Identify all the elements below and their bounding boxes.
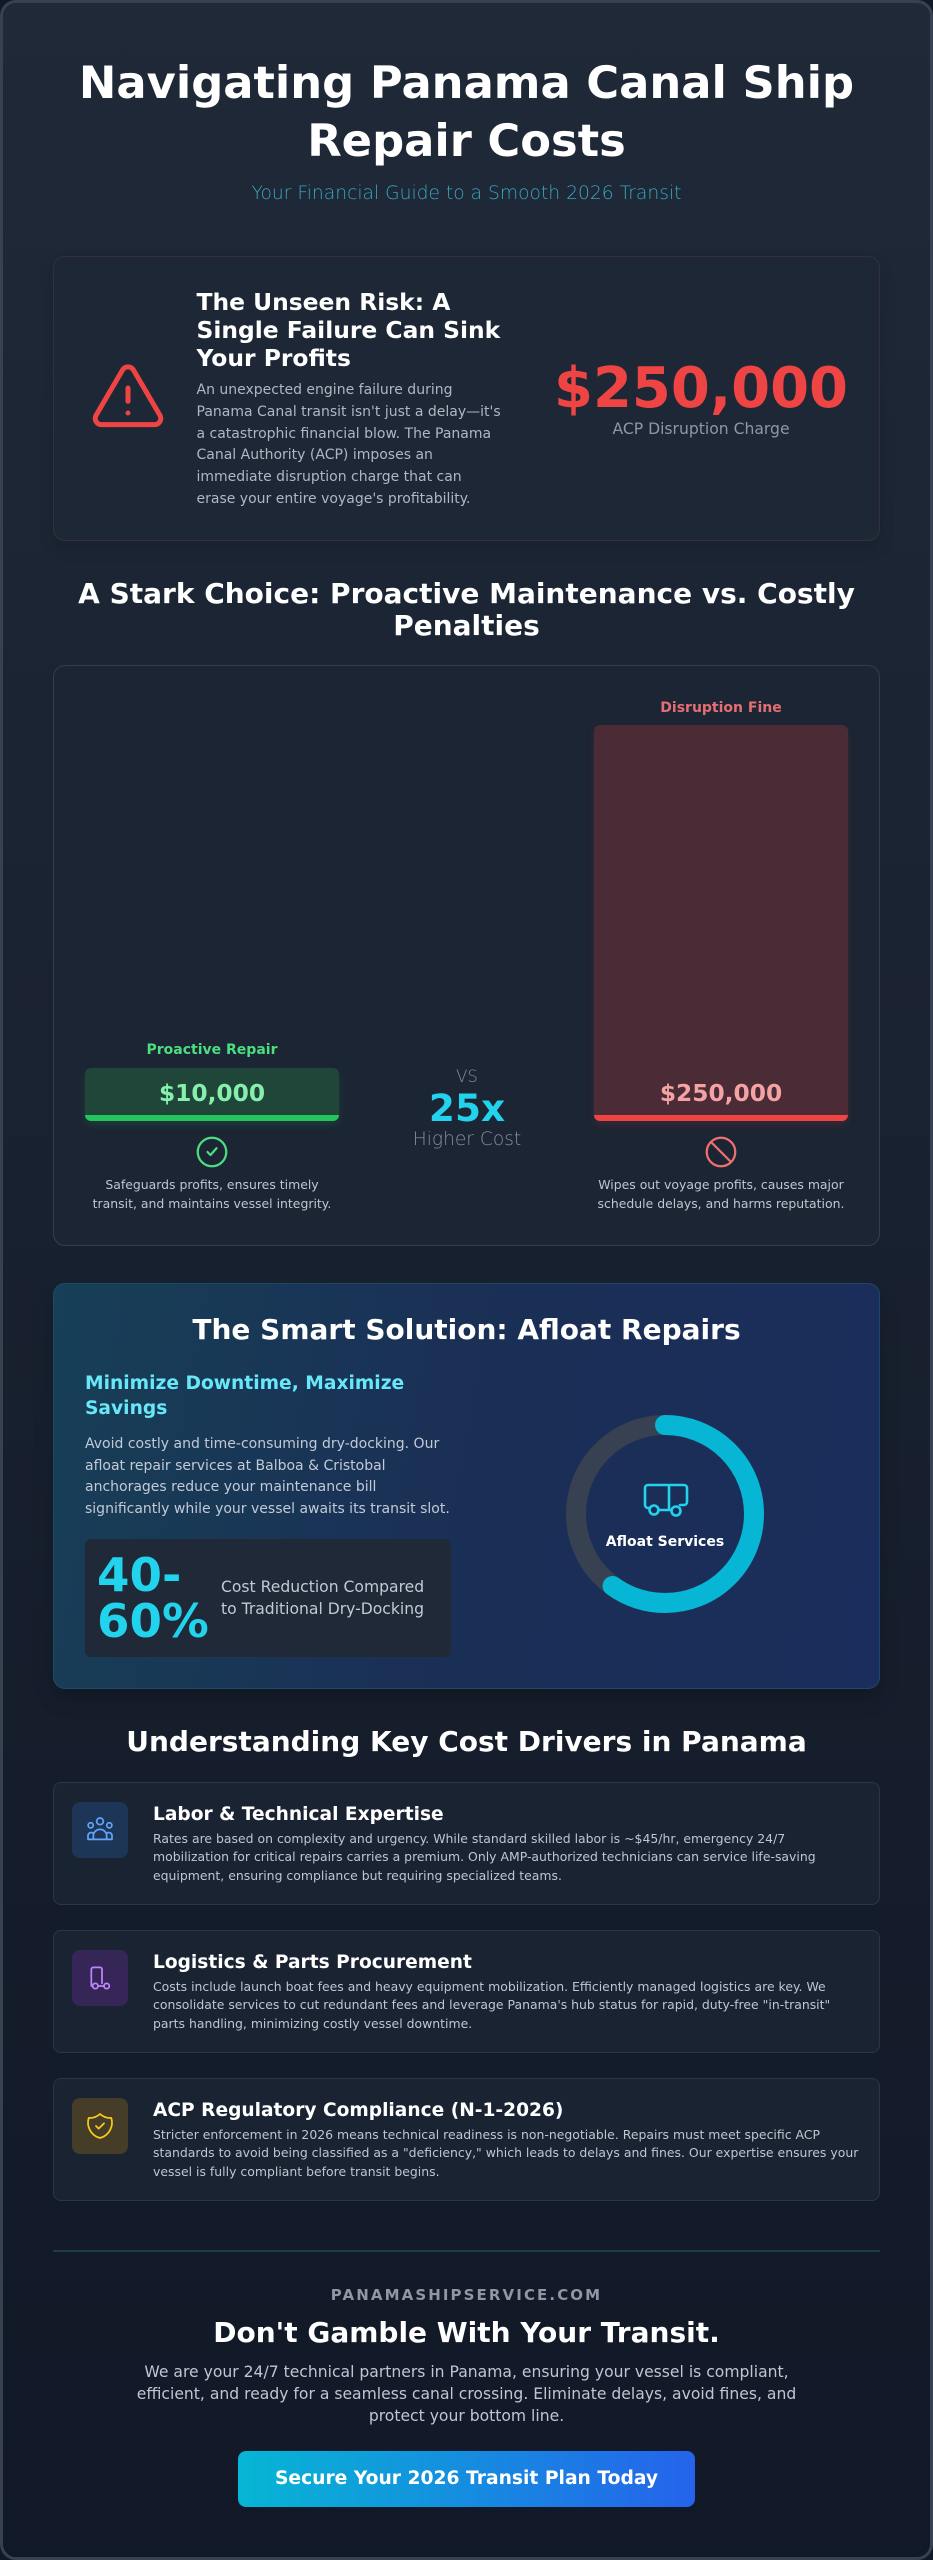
card text: logistics: Costs include launch boat fees and heavy equipment mobilization. Efficiently managed logistics are key. We [153, 1978, 826, 1994]
label: afloat services: Afloat Services [606, 1534, 724, 1550]
heading: stark choice: A Stark Choice: Proactive Maintenance vs. Costly [78, 577, 855, 610]
multiplier: 25x [429, 1086, 505, 1130]
panel: afloat repairs [53, 1283, 880, 1689]
stat box [85, 1539, 451, 1657]
subheading: Minimize Downtime, Maximize [85, 1373, 404, 1394]
card: compliance [53, 2078, 880, 2201]
card title: compliance: ACP Regulatory Compliance (N-1-2026) [153, 2100, 563, 2121]
chart: ring [566, 1415, 764, 1613]
text: disruption impact: Wipes out voyage profits, causes major [598, 1177, 844, 1192]
stat: disruption charge: $250,000 [554, 356, 848, 421]
text: footer: efficient, and ready for a seamless canal crossing. Eliminate delays, avoid fines, and [137, 2385, 796, 2403]
label: disruption: Disruption Fine [660, 700, 782, 716]
stat: cost reduction: 40- [97, 1549, 181, 1603]
card text: compliance: standards to avoid being classified as a "deficiency," which leads to delays and fines. Our expertise ensures your [153, 2145, 858, 2160]
text: unseen risk: erase your entire voyage's profitability. [196, 491, 470, 507]
text: proactive benefits: Safeguards profits, ensures timely [105, 1177, 319, 1192]
text: unseen risk: An unexpected engine failure during [196, 382, 452, 398]
heading: unseen risk: Your Profits [196, 344, 351, 372]
text: disruption impact: schedule delays, and harms reputation. [598, 1196, 844, 1211]
bar: disruption fine [594, 725, 848, 1121]
stat text: Cost Reduction Compared [221, 1578, 424, 1596]
label: proactive: Proactive Repair [147, 1042, 277, 1058]
text: footer [137, 2363, 796, 2425]
stat label: ACP Disruption Charge [612, 420, 790, 438]
stat: cost reduction [97, 1549, 209, 1649]
text: unseen risk: immediate disruption charge that can [196, 469, 462, 485]
card text: labor: equipment, ensuring compliance but requiring specialized teams. [153, 1868, 562, 1883]
text: afloat body: Avoid costly and time-consuming dry-docking. Our [85, 1436, 439, 1452]
card text: labor: Rates are based on complexity and urgency. While standard skilled labor is ~$45/hr, emergency 24/7 [153, 1830, 785, 1846]
text: proactive benefits [92, 1177, 331, 1211]
text: unseen risk: Panama Canal transit isn't just a delay—it's [196, 404, 501, 420]
vs: VS [456, 1067, 478, 1086]
text: afloat body: significantly while your vessel awaits its transit slot. [85, 1501, 450, 1517]
stat text: to Traditional Dry-Docking [221, 1600, 424, 1618]
text: unseen risk [196, 382, 501, 507]
value: proactive: $10,000 [159, 1080, 265, 1107]
value: disruption: $250,000 [660, 1080, 782, 1107]
heading: stark choice [78, 577, 855, 642]
button: Secure Your 2026 Transit Plan Today [275, 2468, 658, 2489]
card text: compliance: vessel is fully compliant before transit begins. [153, 2164, 440, 2179]
heading: unseen risk [196, 288, 501, 372]
text: proactive benefits: transit, and maintains vessel integrity. [93, 1196, 331, 1211]
card text: labor [153, 1830, 816, 1883]
title: Navigating Panama Canal Ship [79, 56, 854, 109]
text: afloat body: anchorages reduce your maintenance bill [85, 1479, 376, 1495]
text: afloat body: afloat repair services at Balboa & Cristobal [85, 1458, 386, 1474]
heading: stark choice: Penalties [393, 609, 540, 642]
heading: afloat repairs: The Smart Solution: Afloat Repairs [192, 1313, 741, 1346]
button [238, 2451, 695, 2507]
text: footer: We are your 24/7 technical partners in Panama, ensuring your vessel is compliant, [144, 2363, 789, 2381]
card: logistics [53, 1930, 880, 2053]
card: labor [53, 1782, 880, 1905]
subtitle: Your Financial Guide to a Smooth 2026 Transit [252, 183, 681, 204]
heading: unseen risk: Single Failure Can Sink [196, 316, 500, 344]
card text: logistics [153, 1978, 830, 2031]
text: footer: protect your bottom line. [369, 2407, 564, 2425]
text: unseen risk: a catastrophic financial blow. The Panama [196, 426, 491, 442]
brand: PANAMASHIPSERVICE.COM [331, 2286, 602, 2304]
heading: unseen risk: The Unseen Risk: A [196, 288, 450, 316]
card text: compliance: Stricter enforcement in 2026 means technical readiness is non-negotiable. Repairs must meet specific ACP [153, 2126, 820, 2142]
bar: proactive repair [85, 1068, 339, 1121]
stat: cost reduction: 60% [97, 1595, 209, 1649]
icon: warning triangle [92, 364, 164, 428]
text: unseen risk: Canal Authority (ACP) imposes an [196, 447, 433, 463]
icon: ban [706, 1136, 736, 1168]
title [79, 56, 854, 167]
subheading: Savings [85, 1398, 167, 1419]
text: afloat body [85, 1436, 450, 1517]
heading: cost drivers: Understanding Key Cost Drivers in Panama [126, 1725, 807, 1758]
card title: labor: Labor & Technical Expertise [153, 1804, 444, 1825]
heading: footer: Don't Gamble With Your Transit. [213, 2316, 720, 2349]
icon: people [72, 1802, 128, 1858]
icon: check [196, 1136, 228, 1168]
higher cost: Higher Cost [413, 1129, 521, 1150]
icon: shield [72, 2098, 128, 2154]
icon: truck [644, 1484, 688, 1517]
card text: logistics: consolidate services to cut redundant fees and leverage Panama's hub status for rapid, duty-free "in-transit" [153, 1997, 830, 2012]
panel: comparison [53, 665, 880, 1246]
subheading [85, 1373, 404, 1419]
card text: logistics: parts handling, minimizing costly vessel downtime. [153, 2016, 472, 2031]
card title: logistics: Logistics & Parts Procurement [153, 1952, 472, 1973]
title: Repair Costs [307, 114, 626, 167]
card text: labor: mobilization for critical repairs carries a premium. Only AMP-authorized technicians can service life-saving [153, 1849, 816, 1864]
panel: unseen risk [53, 256, 880, 541]
card text: compliance [153, 2126, 858, 2179]
icon: cart [72, 1950, 128, 2006]
stat text [221, 1578, 424, 1618]
text: disruption impact [598, 1177, 844, 1211]
